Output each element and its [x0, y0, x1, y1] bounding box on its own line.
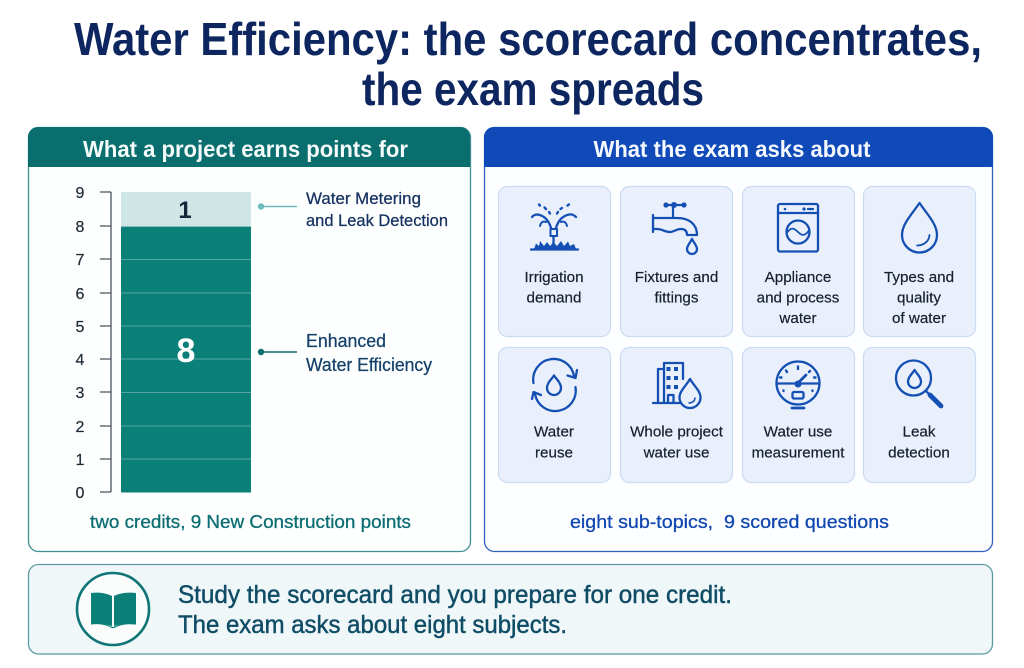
callout: enhanced water efficiency: Water Efficiency — [306, 355, 432, 375]
panel: what a project earns points for — [28, 127, 470, 552]
panel heading: scorecard — [28, 127, 470, 167]
card: water use measurement: Water use — [764, 424, 832, 440]
card: types and quality of water: Types and — [884, 269, 954, 286]
card: water use measurement: measurement — [752, 444, 845, 462]
bar segment: 1 point: 1 — [178, 197, 192, 224]
panel: takeaway — [28, 564, 992, 654]
axis: 2 — [76, 419, 85, 436]
stacked bar chart — [76, 185, 251, 502]
icon: washing machine — [778, 204, 818, 252]
title: the exam spreads — [362, 63, 704, 115]
icon: sprinkler — [531, 204, 578, 250]
title — [74, 13, 982, 115]
card: leak detection: detection — [888, 444, 950, 462]
card: fixtures and fittings — [620, 186, 732, 336]
caption: eight sub-topics: eight sub-topics, 9 scored questions — [570, 511, 889, 532]
icon: open book — [77, 573, 149, 645]
axis: 7 — [76, 252, 85, 269]
icon: water drop — [902, 203, 937, 252]
axis: 0 — [76, 485, 85, 502]
icon: water meter gauge — [776, 362, 820, 408]
axis: 1 — [76, 452, 85, 469]
card: appliance and process water: and process — [757, 290, 840, 306]
axis — [76, 185, 111, 502]
card: irrigation demand: Irrigation — [524, 269, 584, 286]
card: water reuse: Water — [534, 424, 574, 440]
card: types and quality of water: quality — [897, 290, 941, 306]
card: whole project water use: Whole project — [630, 424, 724, 440]
axis: 6 — [76, 286, 85, 303]
card: whole project water use — [620, 348, 732, 482]
card: whole project water use: water use — [643, 444, 709, 462]
axis: 3 — [76, 385, 85, 402]
axis: 8 — [76, 219, 85, 236]
callout: water metering and leak detection: and Leak Detection — [306, 212, 448, 230]
card: types and quality of water: of water — [892, 310, 946, 327]
axis: 5 — [76, 319, 85, 336]
icon: faucet — [653, 202, 697, 254]
bar segment: 1 point — [121, 192, 251, 226]
bar segment: 8 points — [121, 226, 251, 492]
card: fixtures and fittings: fittings — [655, 290, 699, 306]
card: appliance and process water: water — [778, 310, 817, 327]
card: fixtures and fittings: Fixtures and — [635, 269, 718, 286]
callout: enhanced water efficiency — [258, 331, 432, 375]
icon: magnifier with drop — [896, 360, 941, 406]
card: irrigation demand — [498, 186, 610, 336]
icon: reuse cycle — [532, 359, 577, 411]
panel heading: exam — [484, 127, 993, 167]
axis: 4 — [76, 352, 85, 369]
card: irrigation demand: demand — [527, 290, 581, 306]
callout: water metering and leak detection: Water Metering — [306, 190, 421, 208]
card: water reuse — [498, 348, 610, 482]
card: leak detection: Leak — [903, 424, 936, 440]
panel: what the exam asks about — [484, 127, 993, 552]
card: water reuse: reuse — [535, 444, 573, 462]
panel heading: exam: What the exam asks about — [594, 136, 871, 162]
card: appliance and process water — [742, 186, 854, 336]
callout: water metering and leak detection — [258, 190, 448, 230]
caption: two credits: two credits, 9 New Construction points — [90, 511, 411, 532]
card: types and quality of water — [864, 186, 976, 336]
card: water use measurement — [742, 348, 854, 482]
card: leak detection — [864, 348, 976, 482]
takeaway text: The exam asks about eight subjects. — [178, 611, 567, 639]
card: appliance and process water: Appliance — [765, 269, 831, 286]
takeaway text: Study the scorecard and you prepare for one credit. — [178, 581, 732, 609]
panel heading: scorecard: What a project earns points for — [83, 136, 408, 162]
bar segment: 8 points: 8 — [177, 332, 195, 370]
axis: 9 — [76, 185, 85, 202]
takeaway text — [178, 581, 732, 639]
callout: enhanced water efficiency: Enhanced — [306, 331, 386, 351]
icon: building and drop — [653, 363, 700, 408]
